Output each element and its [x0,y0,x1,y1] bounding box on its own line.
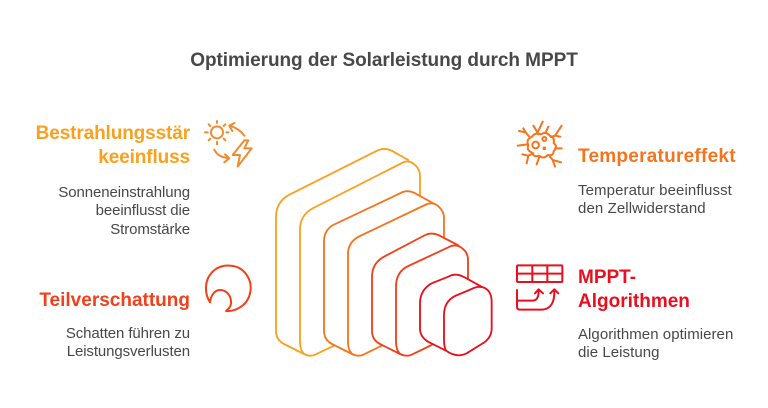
heading: MPPT-Algorithmen: Algorithmen [578,291,690,312]
heading: Bestrahlungsstärke: Bestrahlungsstär [36,123,190,144]
text block: Teilverschattung [39,290,190,360]
plate: red [420,275,492,355]
body: MPPT-Algorithmen: Algorithmen optimieren [578,326,733,343]
text block: MPPT-Algorithmen [578,267,733,361]
body: Temperatureffekt: den Zellwiderstand [578,200,706,217]
body: Bestrahlungsstärke: Sonneneinstrahlung [58,184,190,201]
body: Teilverschattung: Schatten führen zu [66,325,190,342]
plate: dark orange [324,191,444,356]
text block: Bestrahlungsstärke [36,123,190,238]
body: Temperatureffekt [578,182,732,217]
text block: Temperatureffekt [578,146,736,217]
title: Optimierung der Solarleistung durch MPPT [190,50,578,71]
plates group [276,149,492,356]
icon: virus-like heat burst [518,122,562,167]
heading: Bestrahlungsstärke [36,123,190,168]
heading: Bestrahlungsstärke: keeinfluss [98,147,190,168]
heading: Teilverschattung: Teilverschattung [39,290,190,311]
body: Bestrahlungsstärke: beeinflusst die [96,202,190,219]
body: MPPT-Algorithmen [578,326,733,361]
plate: orange [276,149,420,356]
icon: table with arrows [517,265,562,310]
plate: red orange [372,234,468,356]
body: Temperatureffekt: Temperatur beeinflusst [578,182,732,199]
icon: sun, arrows and lightning [205,121,252,167]
icon: partial shade circle [206,266,251,311]
heading: MPPT-Algorithmen: MPPT- [578,267,636,288]
body: MPPT-Algorithmen: die Leistung [578,344,660,361]
heading: Temperatureffekt: Temperatureffekt [578,146,736,167]
body: Teilverschattung [66,325,190,360]
body: Teilverschattung: Leistungsverlusten [67,343,190,360]
heading: MPPT-Algorithmen [578,267,690,312]
body: Bestrahlungsstärke: Stromstärke [110,221,190,238]
body: Bestrahlungsstärke [58,184,190,238]
